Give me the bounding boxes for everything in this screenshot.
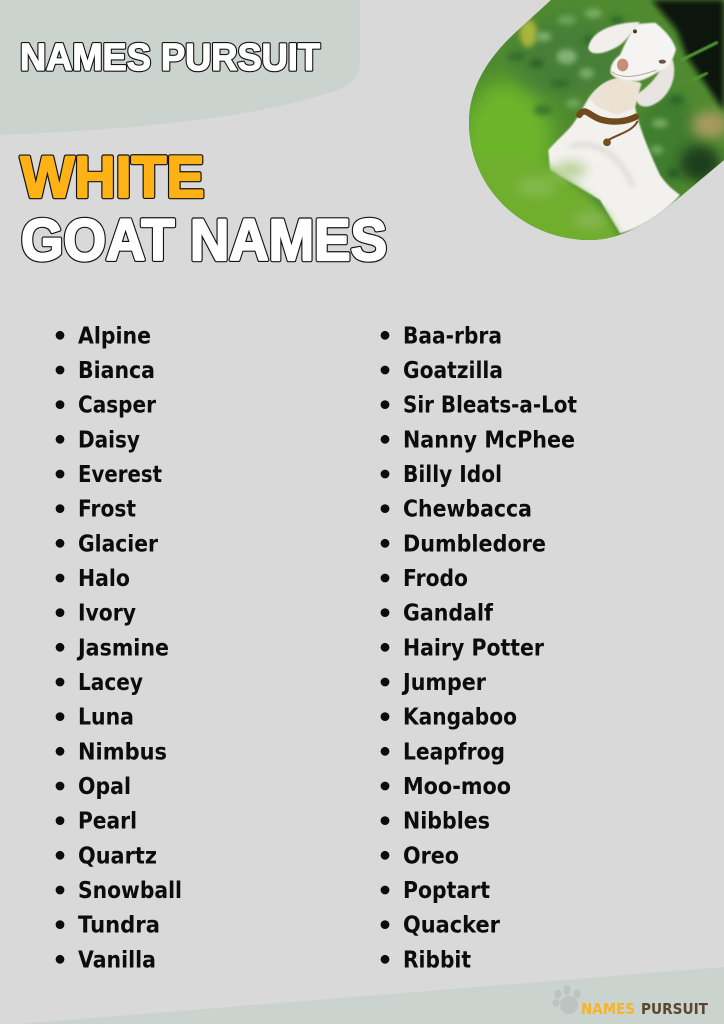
name: Ivory [56,601,136,627]
name: Tundra: Tundra [78,913,160,939]
name: Bianca: Bianca [78,358,155,384]
goat ear right [636,59,674,107]
name: Oreo: Oreo [403,843,459,869]
name: Poptart: Poptart [403,878,490,904]
name: Hairy Potter: Hairy Potter [403,635,545,661]
foreground grass [474,157,624,240]
name: Alpine [56,323,151,349]
name: Opal: Opal [78,774,131,800]
name: Ribbit [381,947,471,973]
name: Jumper: Jumper [401,670,487,696]
brand heading: NAMES PURSUIT [20,37,320,79]
name: Goatzilla: Goatzilla [403,358,503,384]
name: Luna: Luna [78,705,134,731]
goat body [548,78,680,233]
name: Frost [56,497,136,523]
names list: left column [56,323,182,973]
name: Luna [56,705,134,731]
name: Sir Bleats-a-Lot: Sir Bleats-a-Lot [403,393,577,419]
name: Nanny McPhee: Nanny McPhee [403,427,575,453]
name: Ribbit: Ribbit [403,947,471,973]
name: Quacker: Quacker [403,913,501,939]
footer band [18,967,724,1024]
name: Dumbledore: Dumbledore [403,531,546,557]
title: white: WHITE [20,145,204,210]
photo: white goat in greenery [469,0,724,240]
name: Moo-moo: Moo-moo [403,774,511,800]
name: Quartz: Quartz [78,843,157,869]
name: Frodo [381,566,468,592]
name: Pearl: Pearl [78,809,137,835]
name: Halo: Halo [78,566,130,592]
title: goat names: GOAT NAMES [21,208,387,273]
name: Pearl [56,809,137,835]
name: Vanilla: Vanilla [78,947,156,973]
goat head [610,23,676,81]
icon: paw print [552,985,580,1014]
name: Frost: Frost [78,497,136,523]
logo text: pursuit: PURSUIT [641,1000,709,1018]
name: Everest: Everest [78,462,162,488]
name: Daisy [56,427,140,453]
name: Leapfrog: Leapfrog [403,739,505,765]
name: Nibbles: Nibbles [403,809,490,835]
title: goat names: GOAT NAMES [21,208,387,273]
name: Halo [56,566,130,592]
foliage texture [508,9,684,178]
name: Gandalf: Gandalf [403,601,494,627]
brand heading: NAMES PURSUIT [20,37,320,79]
title: white: WHITE [20,145,204,210]
names list: right column [381,323,577,973]
name: Jasmine: Jasmine [76,635,169,661]
name: Oreo [381,843,459,869]
name: Ivory: Ivory [78,601,136,627]
header panel [0,0,360,135]
name: Chewbacca: Chewbacca [403,497,532,523]
name: Billy Idol: Billy Idol [403,462,502,488]
name: Frodo: Frodo [403,566,468,592]
goat ear left [588,22,640,53]
name: Casper: Casper [78,393,157,419]
name: Lacey: Lacey [78,670,143,696]
name: Nimbus: Nimbus [78,739,167,765]
logo text: names: NAMES [581,1000,635,1018]
footer logo [552,985,709,1018]
name: Lacey [56,670,143,696]
name: Daisy: Daisy [78,427,140,453]
goat rope [579,111,637,145]
name: Kangaboo: Kangaboo [403,705,517,731]
name: Snowball: Snowball [78,878,182,904]
name: Baa-rbra: Baa-rbra [403,323,502,349]
name: Opal [56,774,131,800]
name: Alpine: Alpine [78,323,151,349]
name: Everest [56,462,162,488]
name: Glacier: Glacier [78,531,159,557]
